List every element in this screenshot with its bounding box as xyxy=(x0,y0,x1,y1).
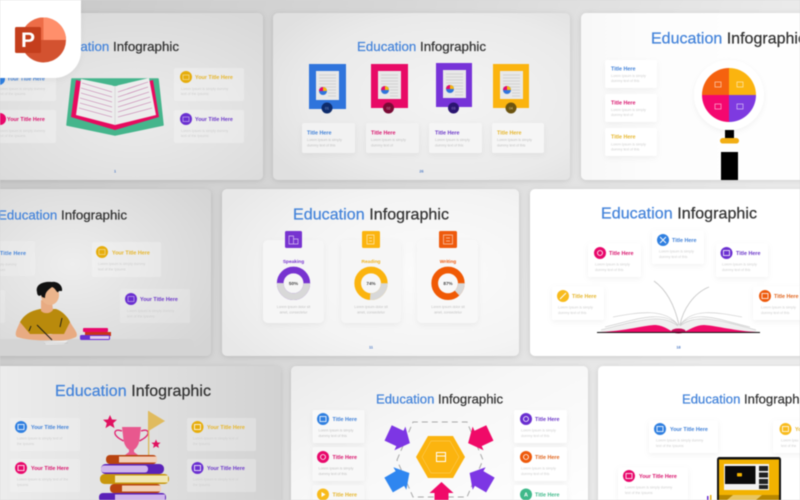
document: yellow: 04 xyxy=(509,106,513,110)
arrow: pink bottom xyxy=(430,482,454,500)
text box: blue xyxy=(649,420,718,453)
text box: yellow xyxy=(92,242,161,277)
text box: blue: Lorem Ipsum is simply dummy xyxy=(656,438,704,442)
text box: yellow: Lorem Ipsum is simply xyxy=(497,138,532,142)
text box: blue left xyxy=(0,69,56,101)
text box: blue xyxy=(605,60,657,88)
text box: purple: Title Here xyxy=(435,130,459,136)
page number: 11 xyxy=(369,346,373,350)
text box: yellow: Lorem Ipsum is simply xyxy=(611,142,646,146)
text box: yellow: dummy text of this xyxy=(611,148,640,152)
text box: yellow: Lorem Ipsu xyxy=(781,438,799,442)
text box: green: A xyxy=(524,492,528,498)
text box: purple: Title Here xyxy=(535,417,559,423)
panel: slide magnifier pie xyxy=(581,13,800,180)
text box: yellow: Title Here xyxy=(572,294,596,300)
desk band xyxy=(0,339,194,356)
arrow: blue bottom left xyxy=(382,462,416,496)
text box: purple: Title Here xyxy=(736,251,760,257)
text box: purple: Lorem Ipsum is simply xyxy=(435,138,470,142)
text box: blue: Title Here xyxy=(672,238,696,244)
panel: slide laptop xyxy=(598,366,800,500)
slide title: Education Infographic xyxy=(55,383,211,400)
text box: blue: Title Here xyxy=(611,66,635,72)
text box: yellow: dummy text of this xyxy=(497,144,526,148)
document: blue: 01 xyxy=(325,106,329,110)
text box: yellow: Title Here xyxy=(497,130,521,136)
text box: yellow: Your Title Here xyxy=(112,250,150,256)
slide card xyxy=(581,13,800,180)
page number: 26 xyxy=(419,170,424,174)
text box: purple xyxy=(429,123,482,153)
slide 26 card xyxy=(273,13,570,180)
card: writing: Writing xyxy=(440,259,456,265)
text box: pink: Lorem Ipsum is simply xyxy=(611,108,646,112)
document: purple xyxy=(436,63,472,114)
slide 11 title: Education Infographic xyxy=(293,206,449,224)
text box: purple right xyxy=(174,110,244,143)
text box: yellow xyxy=(312,485,364,500)
text box: orange: dummy text of this xyxy=(761,311,790,315)
text box: purple: text of the Ipsums xyxy=(127,314,155,318)
text box: blue: Lorem Ipsum is simply xyxy=(318,428,354,432)
central hexagon xyxy=(416,436,465,478)
text box: purple xyxy=(716,243,768,277)
panel: slide 11 donut charts xyxy=(222,189,519,356)
text box: purple: the Ipsums xyxy=(193,483,210,487)
slide 18 title: Education Infographic xyxy=(601,206,757,222)
text box: yellow xyxy=(492,123,544,153)
text box: blue xyxy=(0,241,35,276)
text box: pink: Lorem Ipsum is simply text of the xyxy=(17,478,68,482)
text box: pink: Lorem Ipsum is simply xyxy=(318,466,354,470)
text box: yellow xyxy=(605,128,657,156)
document: blue xyxy=(309,64,346,114)
text box: pink: Lorem Ipsum is simply xyxy=(371,138,406,142)
text box: blue: Your Title Here xyxy=(31,425,69,431)
text box: yellow xyxy=(552,286,604,320)
card: writing xyxy=(417,231,478,323)
text box: purple right: text of the Ipsums xyxy=(181,134,209,138)
slide card xyxy=(0,189,211,356)
text box: pink: dummy text of xyxy=(371,144,393,148)
illustration: open book with flying pages xyxy=(597,281,760,334)
icon: reading xyxy=(362,231,380,248)
text box: purple: Lorem Ipsum is simply xyxy=(722,262,757,266)
text box: orange: Title Here xyxy=(535,455,559,461)
text box: pink xyxy=(312,447,364,481)
donut: 74%: 74% xyxy=(366,281,376,286)
text box: blue xyxy=(312,410,364,443)
illustration: open book xyxy=(67,78,163,135)
text box: yellow: the Ipsums xyxy=(193,442,210,446)
panel: slide student writing xyxy=(0,189,211,356)
document: yellow xyxy=(493,64,529,114)
text box: yellow: text of the xyxy=(781,444,796,448)
arrow: purple top left xyxy=(383,421,415,455)
page number: 18 xyxy=(676,346,681,350)
illustration: magnifier with pie xyxy=(694,60,764,180)
text box: blue xyxy=(302,123,355,153)
text box: orange: dummy text of this xyxy=(521,472,550,476)
text box: pink: Title Here xyxy=(371,130,395,136)
slide card xyxy=(0,366,281,500)
page marker xyxy=(44,342,68,344)
text box: pink: dummy text of this xyxy=(318,472,347,476)
text box: purple: Lorem Ipsum is simply dummy xyxy=(127,309,175,313)
illustration: trophy flag and book stack xyxy=(99,411,169,500)
panel: PowerPoint logo badge xyxy=(0,0,81,78)
text box: yellow right: Lorem Ipsum is simply dummy xyxy=(181,87,229,91)
text box: pink xyxy=(605,94,657,122)
text box: blue: dummy text of this xyxy=(611,79,640,83)
text box: orange xyxy=(514,447,567,481)
slide 11 card xyxy=(222,189,519,356)
text box: purple: Lorem Ipsum is simply text of xyxy=(193,478,238,482)
card: speaking xyxy=(263,231,324,323)
card: reading: amet, consectetur xyxy=(357,310,386,314)
text box: blue: the Ipsums xyxy=(17,442,34,446)
text box: pink xyxy=(366,123,419,153)
slide 26 title: Education Infographic xyxy=(357,39,486,54)
text box: yellow: Lorem Ipsum is simply xyxy=(558,306,593,310)
text box: pink: dummy text of xyxy=(611,113,633,117)
text box: blue: dummy text of this xyxy=(307,144,336,148)
text box: yellow: text of the Ipsums xyxy=(98,268,126,272)
text box: blue: dummy text of this xyxy=(659,255,688,259)
text box: green xyxy=(514,485,567,500)
slide 1 title: Education Infographic xyxy=(50,39,179,54)
text box: blue: Lorem Ipsum is simply text of xyxy=(17,436,62,440)
text box: yellow right: text of the Ipsums xyxy=(181,92,209,96)
text box: purple: dummy text of this xyxy=(435,144,464,148)
slide 18 card xyxy=(530,189,800,356)
document: pink xyxy=(371,64,408,114)
card: speaking: Speaking xyxy=(283,259,304,265)
slide card xyxy=(598,366,800,500)
icon: PowerPoint logo: P xyxy=(21,29,35,52)
text box: blue: dummy text of this xyxy=(318,434,347,438)
text box: yellow right xyxy=(174,68,244,101)
text box: blue: Title Here xyxy=(307,130,331,136)
text box: blue xyxy=(652,230,704,264)
text box: purple xyxy=(120,289,190,323)
text box: yellow: Title Here xyxy=(611,134,635,140)
text box: pink: Lorem Ipsum is simply xyxy=(595,262,630,266)
slide title: Education Infographic xyxy=(0,208,127,222)
illustration: student xyxy=(16,282,77,344)
text box: blue: Lorem Ipsum is simply xyxy=(611,74,646,78)
donut: 50%: 50% xyxy=(289,281,298,286)
page number: 1 xyxy=(114,170,116,174)
arrow: purple bottom right xyxy=(463,462,497,496)
text box: pink left xyxy=(0,110,56,143)
document: purple: 03 xyxy=(452,106,455,110)
card: reading xyxy=(341,231,401,323)
text box: yellow: Lorem Ipsum is simply dummy xyxy=(98,262,146,266)
text box: pink: Lorem Ipsum is simply dummy xyxy=(625,486,673,490)
text box: pink: dummy text of this xyxy=(595,268,624,272)
arrow: pink top right xyxy=(463,421,495,455)
text box: purple: dummy text of this xyxy=(521,434,550,438)
card: speaking: Lorem ipsum dolor sit xyxy=(277,305,310,309)
text box: pink xyxy=(10,459,80,492)
text box: blue: Lorem Ipsum is simply xyxy=(307,138,342,142)
text box: yellow: Title Here xyxy=(332,492,357,498)
text box: blue: Your Title Here xyxy=(670,427,708,433)
card: writing: Lorem ipsum dolor sit xyxy=(431,305,465,309)
text box: blue xyxy=(10,418,80,451)
panel: slide hexagon arrows xyxy=(291,366,588,500)
text box: purple: dummy text of this xyxy=(722,268,751,272)
panel: slide 1 open book xyxy=(0,13,263,180)
text box: pink: Ipsums xyxy=(17,483,29,487)
text box: pink: Your Title Here xyxy=(639,474,677,480)
icon: writing xyxy=(439,231,457,248)
text box: purple right: Your Title Here xyxy=(195,117,233,123)
text box: blue: text of the Ipsums xyxy=(656,444,684,448)
illustration: book stack xyxy=(80,328,111,340)
text box: yellow xyxy=(187,418,256,451)
text box: yellow: dummy text of this xyxy=(558,311,587,315)
text box: blue left: Your Title Here xyxy=(7,76,45,82)
icon: speaking xyxy=(285,231,302,248)
text box: yellow: Your Title Here xyxy=(207,425,245,431)
text box: orange: Lorem Ipsum is simply xyxy=(521,466,556,470)
text box: lower left xyxy=(0,290,5,323)
card: reading: Reading xyxy=(362,259,381,265)
dashed hexagon xyxy=(397,422,483,497)
panel: slide 26 documents xyxy=(273,13,570,180)
slide title: Education Infographic xyxy=(376,392,503,406)
text box: purple xyxy=(514,410,567,443)
text box: yellow: Lorem Ipsum is simply text of xyxy=(193,436,238,440)
text box: purple: Your Title Here xyxy=(207,466,245,472)
text box: yellow xyxy=(773,420,800,453)
text box: purple right: Lorem Ipsum is simply dummy xyxy=(181,129,229,133)
text box: purple: Lorem Ipsum is simply xyxy=(521,428,556,432)
text box: blue: Title Here xyxy=(0,251,26,257)
panel: slide 18 open book xyxy=(530,189,800,356)
text box: purple xyxy=(187,459,256,492)
document: pink: 02 xyxy=(387,106,390,110)
text box: pink xyxy=(588,243,641,277)
text box: orange xyxy=(753,286,800,320)
text box: green: Title Here xyxy=(535,492,559,498)
card: reading: Lorem ipsum dolor sit xyxy=(354,305,388,309)
text box: pink: text of the Ipsums xyxy=(625,491,653,495)
white badge xyxy=(0,0,81,78)
text box: blue: Title Here xyxy=(332,417,357,423)
panel: slide trophy on books xyxy=(0,366,281,500)
text box: purple: Your Title Here xyxy=(140,297,178,303)
slide 1 card xyxy=(0,13,263,180)
text box: orange: Lorem Ipsum is simply xyxy=(761,306,796,310)
illustration: laptop xyxy=(707,457,781,500)
text box: pink xyxy=(618,467,688,500)
text box: blue: Lorem Ipsum is simply xyxy=(659,250,694,254)
card: writing: amet, consectetur xyxy=(434,310,463,314)
text box: pink: Title Here xyxy=(609,251,633,257)
text box: pink: Title Here xyxy=(332,455,357,461)
slide card xyxy=(291,366,588,500)
text box: orange: Title Here xyxy=(774,294,798,300)
text box: yellow right: Your Title Here xyxy=(195,75,233,81)
donut: 87%: 87% xyxy=(443,281,453,286)
text box: pink: Title Here xyxy=(611,100,635,106)
text box: pink left: Your Title Here xyxy=(7,117,45,123)
card: speaking: amet, consectetur xyxy=(280,310,308,314)
text box: pink: Your Title Here xyxy=(31,466,69,472)
